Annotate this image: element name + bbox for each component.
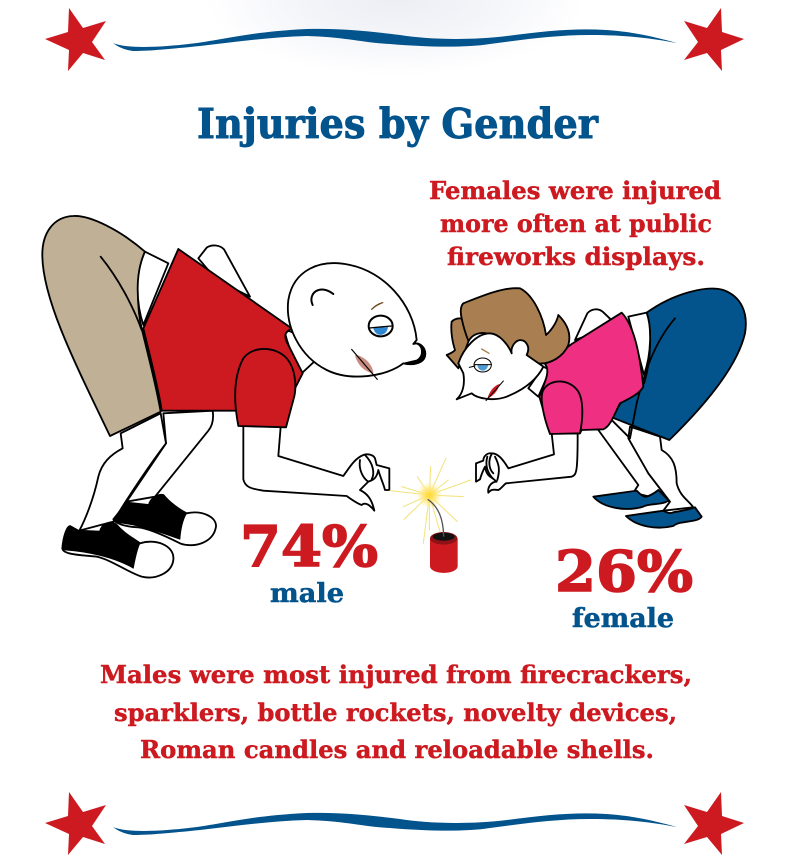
- front shoe: [626, 507, 702, 528]
- stat: male: [240, 514, 378, 609]
- front leg: [79, 413, 166, 531]
- back shoe: [593, 490, 668, 509]
- wave: [113, 813, 677, 835]
- icon: firecracker with sparkler: [390, 458, 471, 573]
- far arm: [198, 245, 250, 297]
- brow: [482, 349, 489, 353]
- stat: female: female: [572, 604, 674, 634]
- icon: left star: [45, 792, 106, 855]
- icon: left star: [45, 8, 106, 71]
- text: females note: [429, 176, 721, 271]
- sleeve: [235, 349, 295, 427]
- eye: [469, 358, 491, 372]
- face: [457, 333, 543, 399]
- text: males note: [100, 660, 692, 764]
- arm and hand: [243, 426, 389, 511]
- arm and hand: [476, 433, 578, 493]
- back shoe: [113, 495, 216, 545]
- wave: [113, 29, 677, 51]
- text: females note: Females were injured: [429, 176, 721, 205]
- title: Injuries by Gender: [197, 100, 599, 148]
- neck: [285, 331, 316, 373]
- eye: [369, 316, 393, 336]
- far arm: [575, 309, 611, 340]
- shirt: [539, 313, 643, 433]
- nose: [405, 344, 426, 364]
- sparkler glow: [390, 458, 471, 543]
- text: males note: Males were most injured from firecrackers,: [100, 660, 692, 689]
- front leg: [628, 427, 693, 511]
- neck: [528, 367, 550, 397]
- front shoe: [62, 523, 173, 578]
- back leg: [127, 411, 213, 502]
- hair: [447, 288, 569, 368]
- back leg: [598, 418, 670, 502]
- waist gap: [138, 252, 168, 325]
- fuse: [428, 499, 444, 537]
- ear: [311, 289, 333, 305]
- waist gap: [628, 313, 650, 375]
- lips: [486, 381, 503, 401]
- top banner: [45, 8, 744, 71]
- text: females note: fireworks displays.: [447, 242, 705, 271]
- text: males note: sparklers, bottle rockets, novelty devices,: [114, 698, 677, 727]
- sleeve: [542, 381, 582, 434]
- head: [288, 263, 425, 377]
- male figure: [42, 216, 426, 578]
- icon: right star: [684, 792, 744, 855]
- icon: right star: [684, 8, 744, 71]
- skirt: [612, 289, 746, 440]
- text: females note: more often at public: [440, 209, 712, 238]
- shirt: [143, 249, 303, 411]
- brow: [372, 303, 383, 309]
- stat: female: 26%: [555, 539, 693, 605]
- text: males note: Roman candles and reloadable shells.: [140, 735, 654, 764]
- mouth: [352, 349, 377, 379]
- stat: male: 74%: [240, 514, 378, 580]
- female figure: [447, 288, 746, 528]
- shorts: [42, 216, 161, 436]
- stat: male: male: [270, 579, 344, 609]
- bottom banner: [45, 792, 744, 855]
- can: [430, 532, 458, 573]
- stat: female: [555, 539, 693, 634]
